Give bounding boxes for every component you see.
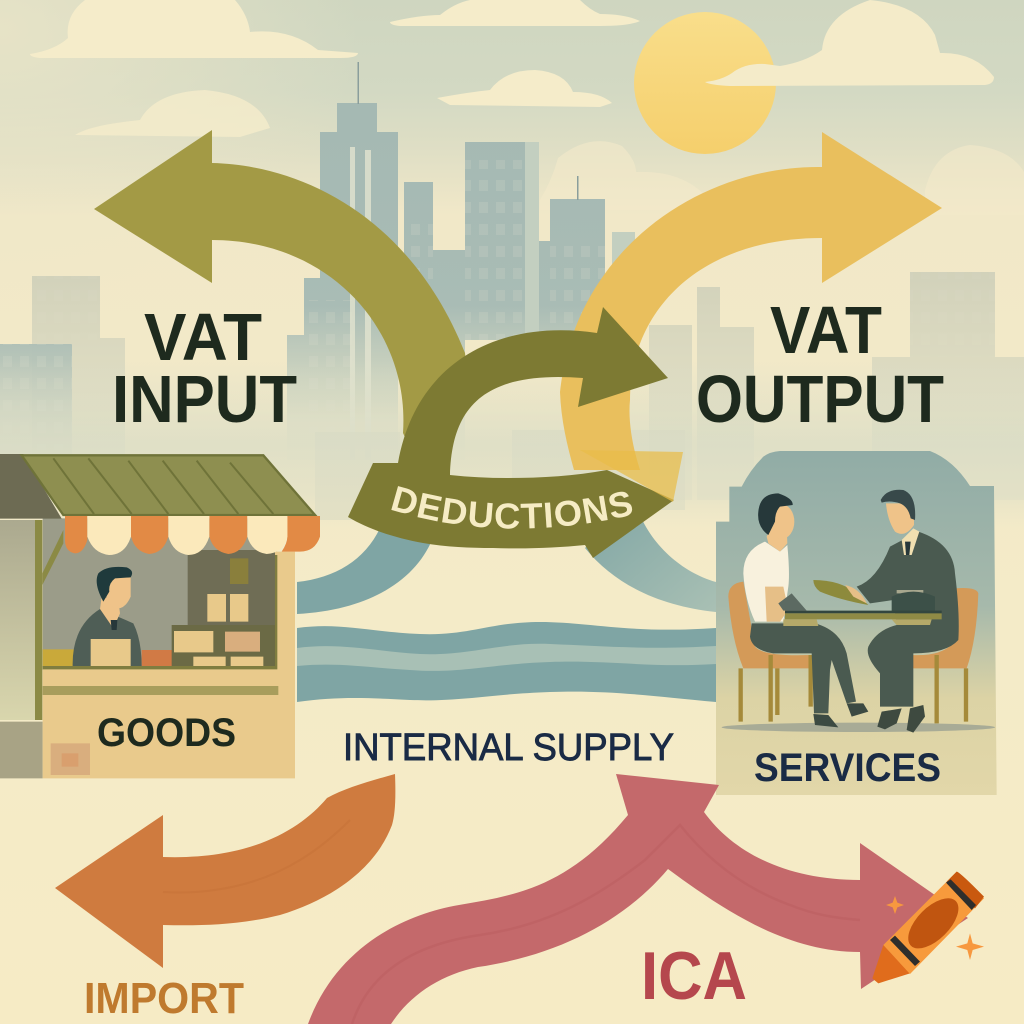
city skyline	[0, 62, 1024, 520]
client	[743, 493, 868, 727]
label: internal supply: INTERNAL SUPPLY	[343, 727, 674, 769]
shopkeeper	[73, 567, 142, 667]
table	[783, 611, 942, 626]
panel: services	[716, 451, 997, 795]
label: goods: GOODS	[97, 711, 236, 755]
arrow: VAT output	[560, 132, 942, 470]
heading: VAT input: VAT	[144, 300, 262, 375]
arrow: right blue branch	[585, 500, 716, 612]
arrow: deductions	[348, 307, 674, 558]
heading: VAT output	[696, 293, 944, 437]
label: deductions: DEDUCTIONS	[391, 486, 632, 529]
heading: VAT input: INPUT	[112, 362, 297, 437]
label: import: IMPORT	[84, 974, 244, 1023]
river stripes	[297, 622, 716, 702]
label: ICA: ICA	[641, 938, 747, 1014]
label: services: SERVICES	[754, 746, 941, 790]
arrow: VAT input	[94, 130, 470, 470]
panel: goods stall	[0, 454, 320, 778]
faint clouds	[540, 141, 1024, 215]
icon: crayon	[872, 872, 984, 983]
clouds	[30, 0, 640, 137]
lower fog	[0, 360, 1024, 530]
document	[813, 580, 868, 605]
heading: VAT input	[112, 300, 297, 437]
arrow: ICA	[308, 774, 968, 1024]
advisor	[857, 490, 959, 733]
arrow: import	[55, 774, 395, 968]
sun	[634, 12, 776, 154]
heading: VAT output: OUTPUT	[696, 362, 944, 437]
arrow: left blue branch	[297, 528, 432, 614]
cloud over sun	[705, 0, 994, 86]
heading: VAT output: VAT	[770, 293, 882, 368]
chairs	[728, 582, 978, 723]
arrow: yellow head overlapping deductions	[580, 450, 683, 502]
